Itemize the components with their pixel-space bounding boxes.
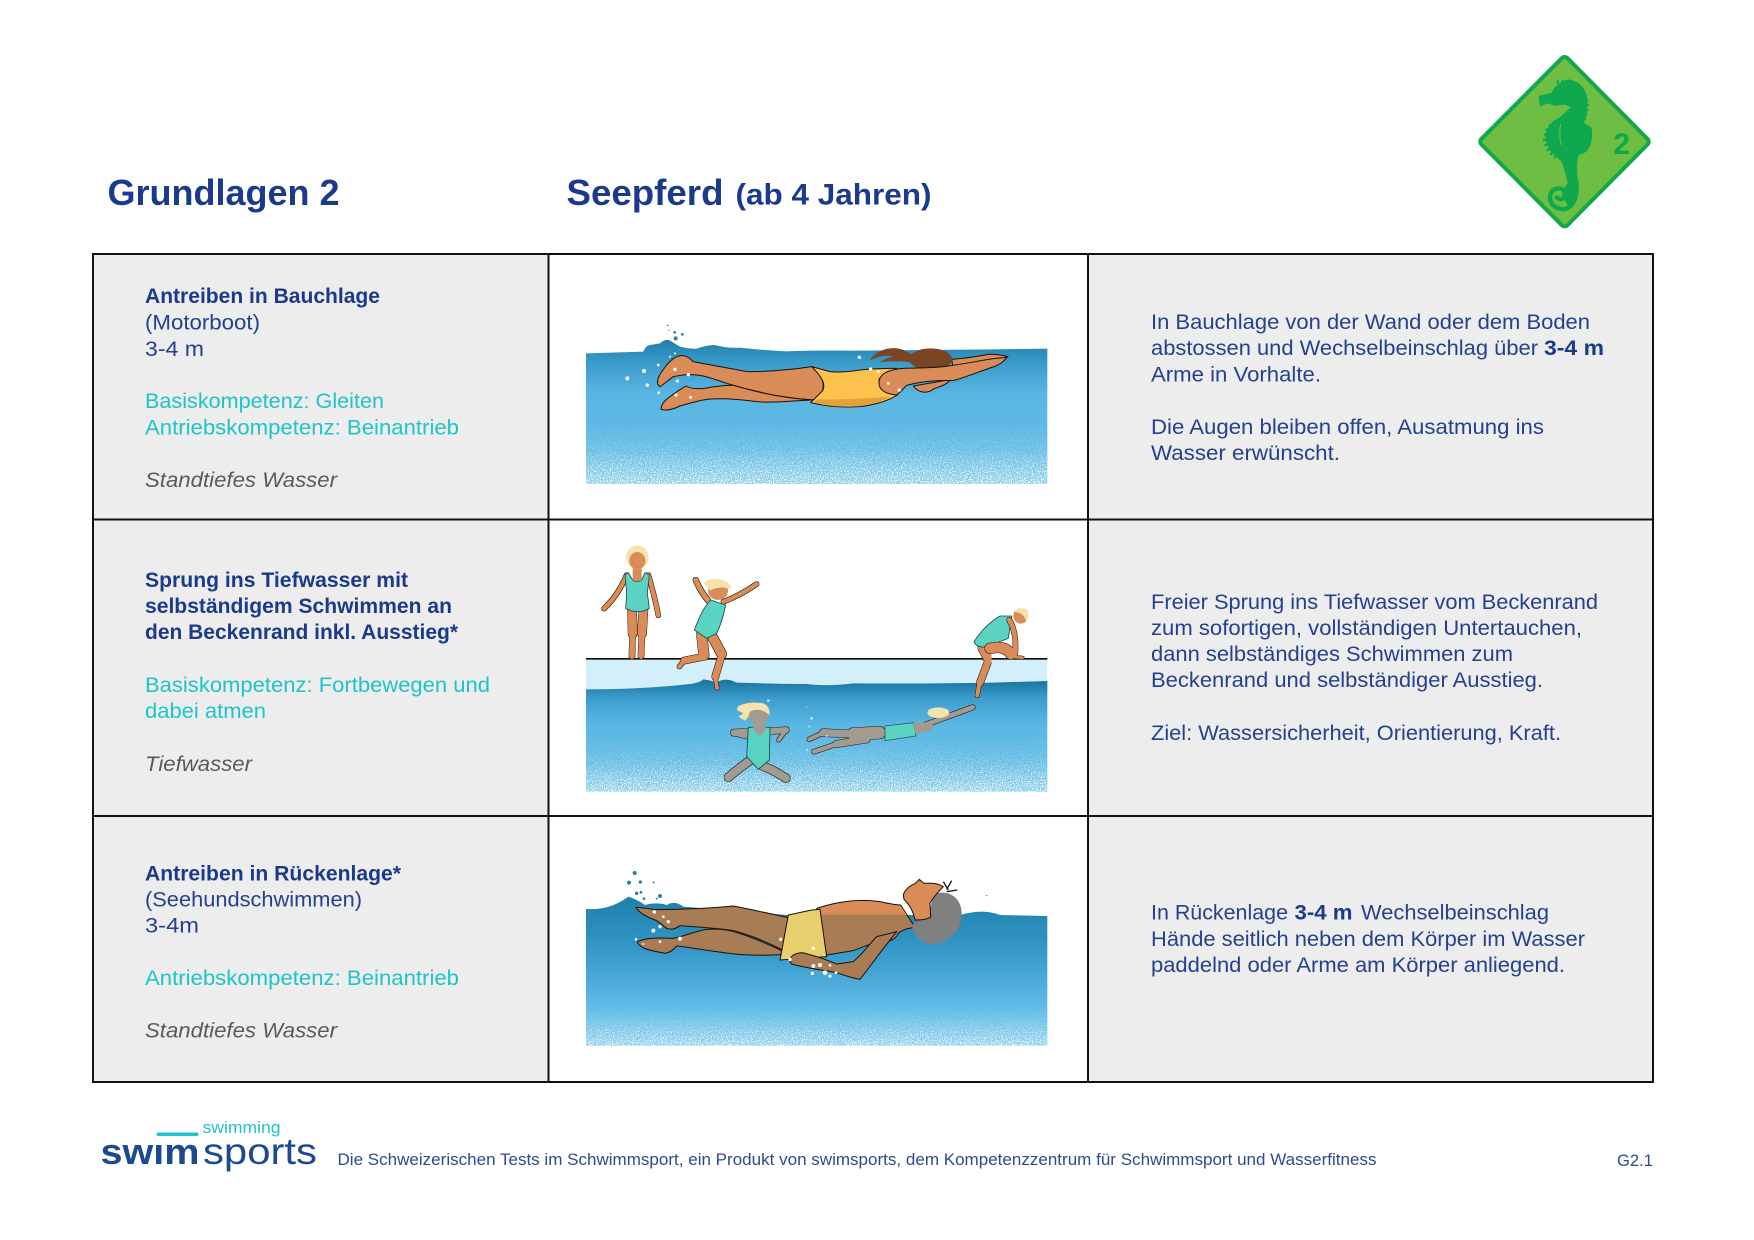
text block: Antreiben in Rückenlage: Antriebskompetenz: Beinantrieb bbox=[145, 967, 459, 990]
swimmer figure bbox=[636, 879, 962, 979]
text block: Sprung ins Tiefwasser: selbständigem Schwimmen an bbox=[145, 595, 452, 618]
panel: row 1 description bbox=[93, 254, 548, 520]
illustration: backstroke swimmer bbox=[586, 871, 1047, 1046]
text block: Sprung ins Tiefwasser: Tiefwasser bbox=[145, 753, 253, 776]
text block: Bauchlage explanation: Die Augen bleiben offen, Ausatmung ins bbox=[1151, 416, 1544, 439]
swimmer figure bbox=[658, 348, 1008, 410]
text block: Sprung explanation bbox=[1151, 591, 1598, 745]
splash droplets bbox=[635, 910, 837, 978]
panel: row 1 explanation bbox=[1088, 254, 1653, 520]
pool edge bbox=[586, 658, 1047, 660]
text block: Sprung ins Tiefwasser bbox=[145, 569, 490, 776]
text block: Sprung ins Tiefwasser: Basiskompetenz: Fortbewegen und bbox=[145, 674, 490, 697]
text block: Rückenlage explanation: paddelnd oder Arme am Körper anliegend. bbox=[1151, 954, 1565, 977]
text block: Bauchlage explanation: Arme in Vorhalte. bbox=[1151, 364, 1321, 386]
heading: Seepferd (ab 4 Jahren) bbox=[566, 172, 932, 213]
logo: swimsports swimming bbox=[100, 1118, 317, 1172]
panel: row 3 description bbox=[93, 816, 548, 1082]
text block: Sprung explanation: zum sofortigen, vollständigen Untertauchen, bbox=[1151, 617, 1582, 640]
icon: seahorse badge: 2 bbox=[1613, 128, 1630, 161]
text block: Bauchlage explanation: abstossen und Wechselbeinschlag über bbox=[1151, 337, 1538, 360]
pool wall bbox=[586, 659, 1047, 696]
text block: Rückenlage explanation: In Rückenlage bbox=[1151, 902, 1288, 924]
text block: Bauchlage explanation: Wasser erwünscht. bbox=[1151, 442, 1340, 465]
page number: G2.1 bbox=[1617, 1152, 1653, 1170]
panel: row 2 description bbox=[93, 520, 548, 816]
text block: Sprung ins Tiefwasser: dabei atmen bbox=[145, 700, 266, 723]
table: three rows, three columns bbox=[93, 254, 1653, 1082]
text block: Antreiben in Bauchlage: (Motorboot) bbox=[145, 312, 260, 334]
panel: row 2 explanation bbox=[1088, 520, 1653, 816]
text block: Antreiben in Rückenlage: 3-4m bbox=[145, 914, 199, 938]
text block: Rückenlage explanation: Wechselbeinschlag bbox=[1361, 902, 1549, 924]
text block: Antreiben in Rückenlage: Standtiefes Wasser bbox=[145, 1020, 338, 1042]
text block: Antreiben in Rückenlage bbox=[145, 862, 459, 1042]
text block: Bauchlage explanation: 3-4 m bbox=[1544, 337, 1604, 360]
text block: Sprung explanation: Freier Sprung ins Tiefwasser vom Beckenrand bbox=[1151, 591, 1598, 614]
logo: swimsports swimming: swim bbox=[100, 1131, 200, 1172]
text block: Sprung ins Tiefwasser: Sprung ins Tiefwasser mit bbox=[145, 569, 408, 592]
text block: Antreiben in Bauchlage: Antreiben in Bauchlage bbox=[145, 285, 380, 308]
text block: Sprung explanation: dann selbständiges Schwimmen zum bbox=[1151, 643, 1513, 666]
child swimming under water bbox=[809, 707, 973, 752]
child standing on the edge bbox=[604, 545, 658, 656]
logo: swimsports swimming: sports bbox=[203, 1131, 317, 1172]
text block: Sprung explanation: Beckenrand und selbständiger Ausstieg. bbox=[1151, 669, 1543, 692]
text block: Sprung ins Tiefwasser: den Beckenrand inkl. Ausstieg* bbox=[145, 621, 459, 644]
text block: Rückenlage explanation: Hände seitlich neben dem Körper im Wasser bbox=[1151, 928, 1585, 951]
text block: Rückenlage explanation bbox=[1151, 902, 1585, 977]
child climbing out bbox=[974, 608, 1029, 695]
panel: row 3 explanation bbox=[1088, 816, 1653, 1082]
text block: Antreiben in Bauchlage bbox=[145, 285, 459, 492]
splash droplets bbox=[767, 699, 828, 751]
water bbox=[586, 679, 1047, 792]
water bbox=[586, 897, 1047, 1046]
text block: Antreiben in Bauchlage: Antriebskompetenz: Beinantrieb bbox=[145, 416, 459, 440]
icon: seahorse badge bbox=[1484, 61, 1645, 222]
illustration: prone swimmer kicking bbox=[586, 324, 1047, 484]
text block: Rückenlage explanation: 3-4 m bbox=[1294, 902, 1352, 924]
text block: Bauchlage explanation: In Bauchlage von der Wand oder dem Boden bbox=[1151, 311, 1590, 334]
splash droplets bbox=[625, 352, 901, 399]
text block: Sprung explanation: Ziel: Wassersicherheit, Orientierung, Kraft. bbox=[1151, 722, 1561, 745]
text block: Antreiben in Bauchlage: Basiskompetenz: Gleiten bbox=[145, 390, 384, 413]
footer text: Die Schweizerischen Tests im Schwimmsport, ein Produkt von swimsports, dem Kompetenzzentrum für Schwimmsport und Wasserfitness bbox=[338, 1151, 1376, 1169]
logo: swimsports swimming: swimming bbox=[202, 1118, 280, 1137]
child under water bbox=[728, 702, 786, 778]
title: Grundlagen 2: Grundlagen 2 bbox=[108, 172, 340, 213]
text block: Bauchlage explanation bbox=[1151, 311, 1604, 465]
text block: Antreiben in Rückenlage: Antreiben in Rückenlage* bbox=[145, 862, 402, 886]
water bbox=[586, 340, 1047, 484]
heading: Seepferd (ab 4 Jahren): Seepferd bbox=[566, 172, 724, 213]
child jumping bbox=[679, 579, 757, 688]
heading: Seepferd (ab 4 Jahren): (ab 4 Jahren) bbox=[736, 178, 932, 212]
text block: Antreiben in Rückenlage: (Seehundschwimmen) bbox=[145, 888, 362, 912]
text block: Antreiben in Bauchlage: Standtiefes Wasser bbox=[145, 469, 338, 492]
illustration: jump into deep water and climb out bbox=[586, 545, 1047, 792]
text block: Antreiben in Bauchlage: 3-4 m bbox=[145, 338, 204, 361]
